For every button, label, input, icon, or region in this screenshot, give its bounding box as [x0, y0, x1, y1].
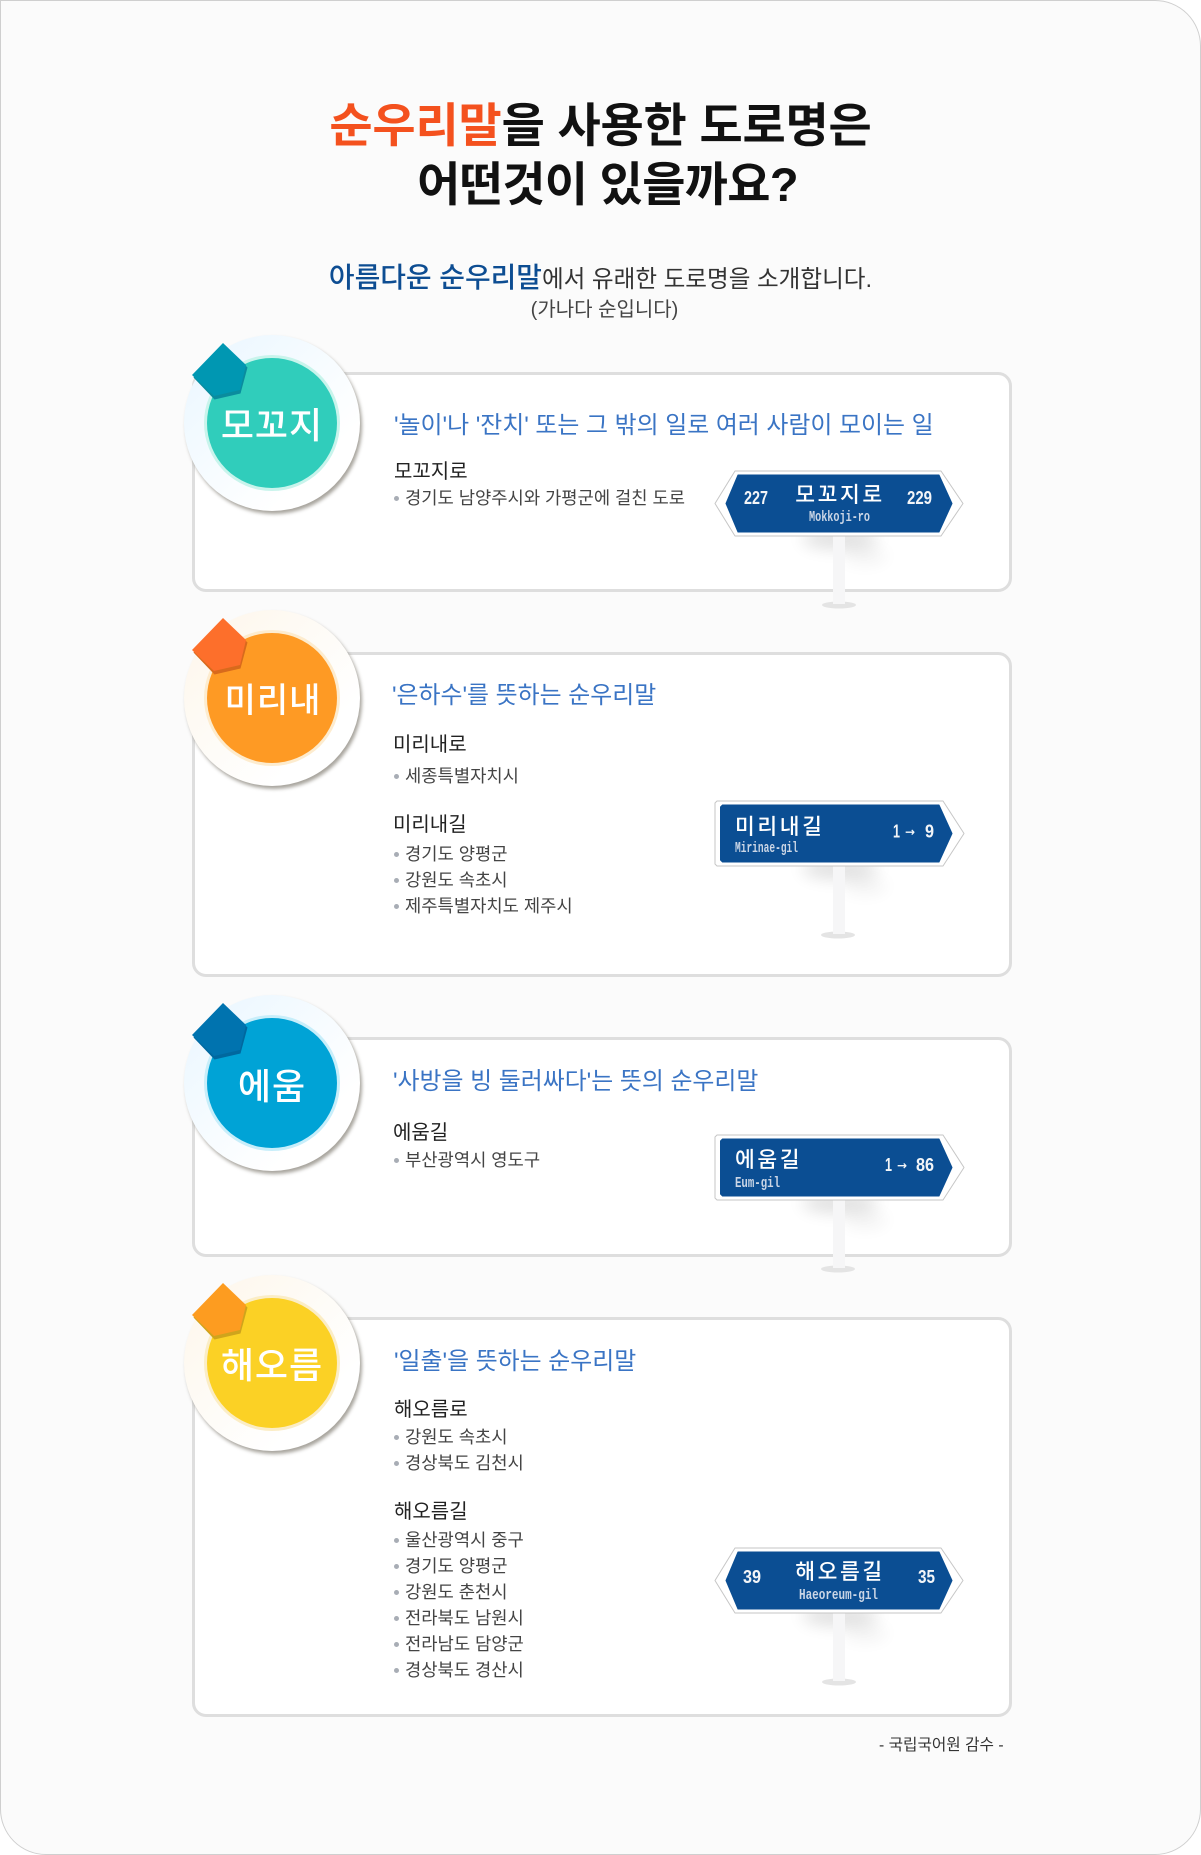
road sign: 모꼬지로: 227: [744, 488, 768, 508]
road sign: 해오름길: 해오름길: [795, 1560, 885, 1584]
panel: 에움: [192, 1037, 1012, 1257]
location: 전라남도 담양군: [405, 1634, 524, 1654]
road sign: 미리내길: 미리내길: [735, 815, 825, 839]
badge: 미리내: [184, 610, 364, 792]
location: 경기도 양평군: [405, 1556, 508, 1576]
location: 경기도 남양주시와 가평군에 걸친 도로: [405, 488, 685, 508]
road sign: 에움길: Eum-gil: [735, 1176, 780, 1192]
road sign: 에움길: 86: [916, 1155, 934, 1175]
road name: 해오름길: 해오름길: [394, 1501, 468, 1523]
title: [329, 99, 872, 211]
location: 강원도 춘천시: [405, 1582, 508, 1602]
title: 어떤것이 있을까요?: [417, 158, 798, 211]
location list: 경기도 양평군: [405, 844, 508, 864]
road sign: 미리내길: 9: [925, 822, 934, 842]
title: 순우리말을 사용한 도로명은: [329, 99, 872, 152]
badge: 모꼬지: 모꼬지: [221, 405, 323, 446]
heading: 모꼬지 meaning: '놀이'나 '잔치' 또는 그 밖의 일로 여러 사람이 모이는 일: [394, 412, 934, 439]
road sign: 에움길: [714, 1134, 964, 1272]
road sign: 해오름길: 39: [743, 1566, 761, 1586]
subtitle note: (가나다 순입니다): [531, 299, 678, 321]
road sign: 미리내길: →: [905, 825, 915, 839]
badge: 에움: 에움: [238, 1066, 306, 1107]
location: 경상북도 김천시: [405, 1453, 524, 1473]
road sign: 에움길: 에움길: [735, 1148, 802, 1172]
road name: 미리내길: 미리내길: [393, 814, 467, 836]
road sign: 해오름길: [714, 1548, 964, 1686]
badge: 모꼬지: [184, 335, 364, 516]
subtitle: 아름다운 순우리말에서 유래한 도로명을 소개합니다.: [329, 262, 872, 293]
road sign: 에움길: 1: [885, 1155, 892, 1175]
heading: 미리내 meaning: '은하수'를 뜻하는 순우리말: [392, 682, 656, 709]
location: 경상북도 경산시: [405, 1660, 524, 1680]
location: 강원도 속초시: [405, 1427, 508, 1447]
location: 울산광역시 중구: [405, 1530, 524, 1550]
road sign: 미리내길: Mirinae-gil: [735, 841, 798, 857]
road sign: 에움길: →: [897, 1158, 907, 1172]
heading: 에움 meaning: '사방을 빙 둘러싸다'는 뜻의 순우리말: [393, 1068, 758, 1095]
road name: 모꼬지로: 모꼬지로: [394, 461, 468, 483]
badge: 미리내: 미리내: [225, 682, 321, 720]
road name: 에움길: 에움길: [393, 1122, 448, 1144]
badge: 에움: [184, 995, 364, 1176]
badge: 해오름: [184, 1275, 364, 1456]
road name: 미리내로: 미리내로: [393, 734, 467, 756]
road sign: 미리내길: 1: [893, 822, 900, 842]
panel: 미리내: [192, 652, 1012, 977]
road sign: 모꼬지로: 모꼬지로: [795, 483, 885, 507]
road sign: 해오름길: 35: [918, 1566, 935, 1586]
credit: - 국립국어원 감수 -: [879, 1737, 1004, 1754]
road sign: 미리내길: [714, 800, 964, 938]
location: 세종특별자치시: [405, 766, 519, 786]
road sign: 모꼬지로: Mokkoji-ro: [809, 510, 870, 526]
location: 부산광역시 영도구: [405, 1150, 540, 1170]
road name: 해오름로: 해오름로: [394, 1399, 468, 1421]
road sign: 모꼬지로: 229: [907, 488, 932, 508]
location list: 강원도 속초시: [405, 870, 508, 890]
location: 전라북도 남원시: [405, 1608, 524, 1628]
panel: 모꼬지: [192, 372, 1012, 592]
badge: 해오름: 해오름: [221, 1345, 323, 1386]
road sign: 해오름길: Haeoreum-gil: [799, 1588, 878, 1604]
location list: 제주특별자치도 제주시: [405, 896, 573, 916]
panel: 해오름: [192, 1317, 1012, 1717]
road sign: 모꼬지로: [714, 470, 964, 608]
heading: 해오름 meaning: '일출'을 뜻하는 순우리말: [394, 1348, 636, 1375]
